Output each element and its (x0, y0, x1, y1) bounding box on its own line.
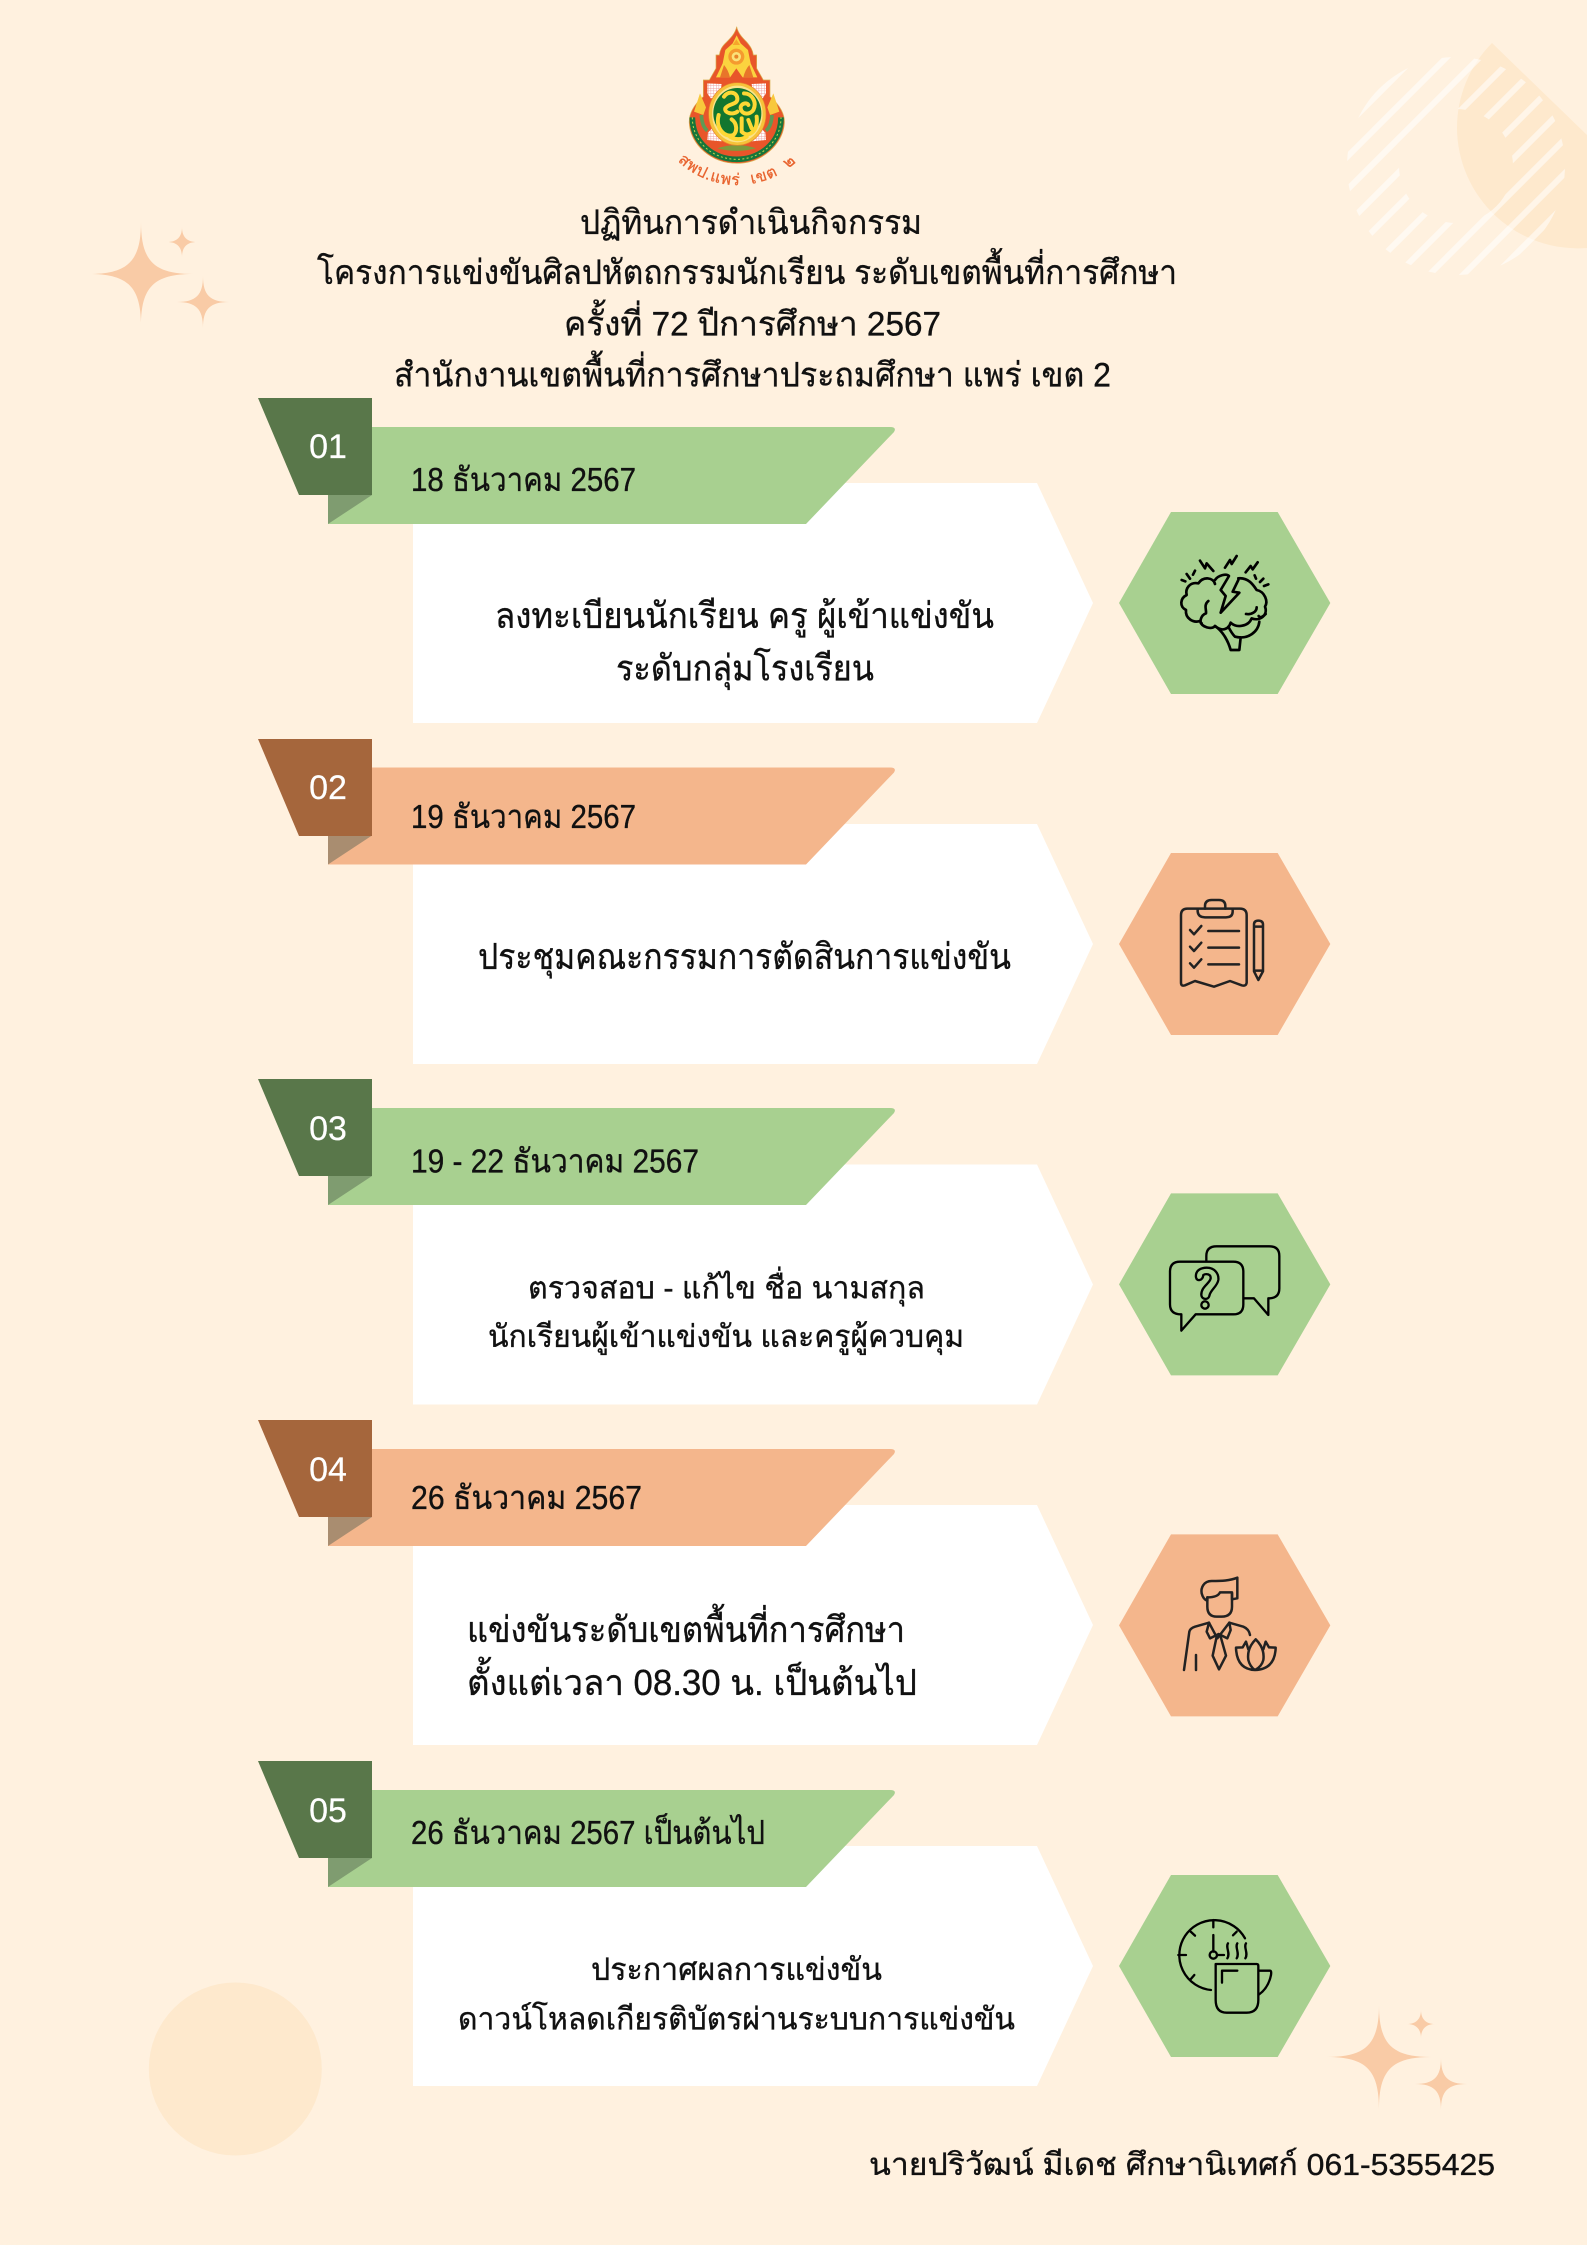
description (467, 1603, 917, 1703)
description (495, 595, 994, 690)
number badge (258, 398, 372, 495)
ribbon fold (328, 1517, 372, 1546)
number badge (258, 739, 372, 836)
number badge (258, 1079, 372, 1176)
ribbon fold (328, 495, 372, 524)
number: 04 (309, 1451, 347, 1489)
title line 1: ปฏิทินการดำเนินกิจกรรม (580, 204, 922, 242)
decoration: bottom right sparkles (1327, 2005, 1467, 2110)
emblem green band (692, 117, 781, 159)
date: 26 ธันวาคม 2567 (411, 1479, 642, 1516)
date: 26 ธันวาคม 2567 เป็นต้นไป (411, 1813, 765, 1851)
hexagon with speech bubbles icon (1119, 1193, 1330, 1375)
footer contact: นายปริวัฒน์ มีเดช ศึกษานิเทศก์ 061-5355425 (869, 2147, 1495, 2182)
description (458, 1952, 1015, 2036)
hexagon with brain icon (1119, 512, 1330, 694)
white arrow card (413, 1846, 1093, 2086)
date ribbon (328, 1449, 895, 1546)
date ribbon (328, 1108, 895, 1205)
white arrow card (413, 1164, 1093, 1404)
emblem lotus corners (707, 83, 766, 141)
hexagon with teacher icon (1119, 1534, 1330, 1716)
icon: clipboard and pencil (1181, 900, 1263, 987)
icon: speech bubbles with question mark (1170, 1246, 1279, 1331)
description: ระดับกลุ่มโรงเรียน (616, 648, 874, 690)
number: 03 (309, 1110, 347, 1148)
emblem outer shape (689, 27, 784, 163)
panel: step 03 (258, 1079, 1330, 1404)
description: ตรวจสอบ - แก้ไข ชื่อ นามสกุล (528, 1266, 925, 1308)
title line 2: โครงการแข่งขันศิลปหัตถกรรมนักเรียน ระดับเขตพื้นที่การศึกษา (317, 248, 1177, 292)
emblem center medallion (709, 83, 766, 145)
decoration: top right shape (1457, 43, 1587, 248)
panel: step 01 (258, 398, 1330, 723)
icon: clock and coffee mug (1178, 1920, 1271, 2013)
panel: step 02 (258, 739, 1330, 1064)
panel: step 05 (258, 1761, 1330, 2086)
white arrow card (413, 483, 1093, 723)
date ribbon (328, 1790, 895, 1887)
title line 4: สำนักงานเขตพื้นที่การศึกษาประถมศึกษา แพร่ เขต 2 (394, 350, 1111, 394)
emblem bottom floral (717, 145, 756, 151)
white arrow card (413, 824, 1093, 1064)
ribbon fold (328, 1858, 372, 1887)
white arrow card (413, 1505, 1093, 1745)
description: นักเรียนผู้เข้าแข่งขัน และครูผู้ควบคุม (488, 1319, 964, 1356)
ribbon fold (328, 1176, 372, 1205)
logo: education office emblem (679, 26, 796, 186)
description: ดาวน์โหลดเกียรติบัตรผ่านระบบการแข่งขัน (458, 2002, 1015, 2036)
title (317, 204, 1177, 394)
description: ประกาศผลการแข่งขัน (591, 1952, 882, 1987)
decoration: striped ring (1347, 57, 1565, 275)
description: ลงทะเบียนนักเรียน ครู ผู้เข้าแข่งขัน (495, 595, 994, 638)
date: 19 ธันวาคม 2567 (411, 798, 636, 835)
date ribbon (328, 768, 895, 864)
hexagon with clock and mug icon (1119, 1875, 1330, 2057)
number: 02 (309, 769, 347, 807)
emblem caption arc: สพป.แพร่ เขต ๒ (679, 156, 796, 186)
panel: step 04 (258, 1420, 1330, 1745)
icon: brain (1181, 556, 1268, 650)
description: ประชุมคณะกรรมการตัดสินการแข่งขัน (478, 936, 1011, 979)
emblem side ornaments (694, 93, 779, 115)
description (488, 1266, 964, 1356)
decoration: bottom left circle (149, 1982, 322, 2156)
decoration: top left sparkles (89, 222, 229, 328)
number: 01 (309, 428, 347, 466)
ribbon fold (328, 836, 372, 864)
title line 3: ครั้งที่ 72 ปีการศึกษา 2567 (564, 300, 941, 344)
number badge (258, 1420, 372, 1517)
number badge (258, 1761, 372, 1858)
number: 05 (309, 1792, 347, 1830)
icon: teacher with lotus (1184, 1578, 1276, 1670)
date: 18 ธันวาคม 2567 (411, 461, 636, 498)
date: 19 - 22 ธันวาคม 2567 (411, 1142, 699, 1180)
date ribbon (328, 427, 895, 524)
description: แข่งขันระดับเขตพื้นที่การศึกษา (467, 1603, 905, 1650)
emblem roof ornament (716, 35, 757, 77)
description: ตั้งแต่เวลา 08.30 น. เป็นต้นไป (467, 1656, 917, 1703)
hexagon with clipboard icon (1119, 853, 1330, 1035)
